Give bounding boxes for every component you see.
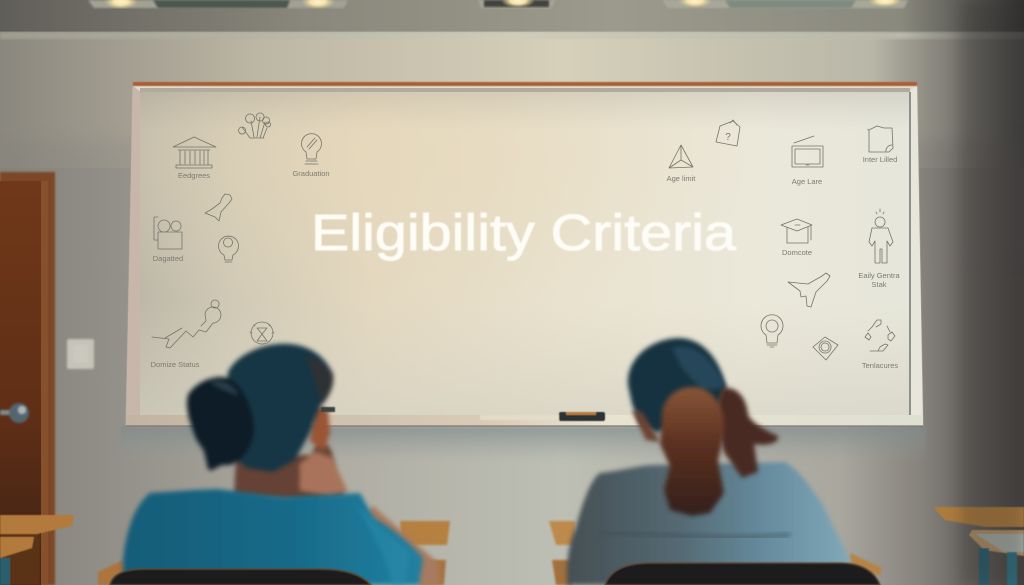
light switch [67,339,94,369]
icon: chess piece [205,194,232,221]
icon: door handle [0,403,29,423]
icon: bulb, Graduation [292,134,330,178]
icon: winding line [152,300,221,348]
ponytail small [714,388,778,478]
bun [187,377,254,470]
right vignette [960,0,1024,585]
icon: document, Inter Lilled: Inter Lilled [863,155,897,164]
icon: building, Eedgrees [173,137,216,180]
shirt [123,489,423,585]
glasses [321,407,335,412]
label: Domize Status: Domize Status [151,360,200,369]
icon: camera, Dagatted: Dagatted [153,254,183,263]
shirt [567,462,852,585]
hair [187,344,333,472]
marker on tray [480,412,605,421]
board wall shadow [120,426,926,462]
icon: airplane [788,273,830,307]
hair [628,338,726,432]
student left [110,344,440,585]
whiteboard [126,82,923,427]
left icon group [151,113,330,369]
icon: camera, Dagatted [153,217,183,263]
right icon group [667,120,900,370]
icon: tree [239,113,271,138]
icon: tablet, Age Lare [792,136,823,186]
icon: cycle, Tenlacures: Tenlacures [862,361,898,370]
skin behind ear [632,410,660,442]
icon: document, Inter Lilled [863,126,897,164]
student right [567,338,880,585]
neck and hand [234,405,440,585]
icon: diamond target [813,337,838,360]
icon: building, Eedgrees: Eedgrees [178,171,210,180]
ponytail main [660,387,724,516]
chair [110,569,371,585]
frame [126,86,923,426]
icon: person, Eaily Gentra Stak [858,209,900,289]
title: Eligibility Criteria [311,204,737,261]
icon: graduation cap, Domcote [781,219,812,257]
icon: person, Eaily Gentra Stak: Eaily Gentra [858,271,900,280]
icon: cycle, Tenlacures [862,320,898,370]
icon: tablet, Age Lare: Age Lare [792,177,822,186]
top rail [133,82,917,87]
icon: graduation cap, Domcote: Domcote [782,248,812,257]
center desks [98,521,882,585]
icon: prism, Age limit [667,145,696,183]
door [0,172,55,585]
chair [605,563,880,585]
icon: lightbulb [218,236,239,262]
ceiling with lights [0,0,1024,39]
icon: person, Eaily Gentra Stak: Stak [871,280,887,289]
icon: gear [250,322,274,344]
icon: prism, Age limit: Age limit [667,174,696,183]
icon: question note: ? [725,132,731,143]
board surface [140,92,910,415]
icon: bulb, Graduation: Graduation [292,169,330,178]
right desks [933,507,1024,585]
icon: question note [716,120,740,146]
left desks [0,515,74,585]
icon: large lightbulb [761,315,783,347]
